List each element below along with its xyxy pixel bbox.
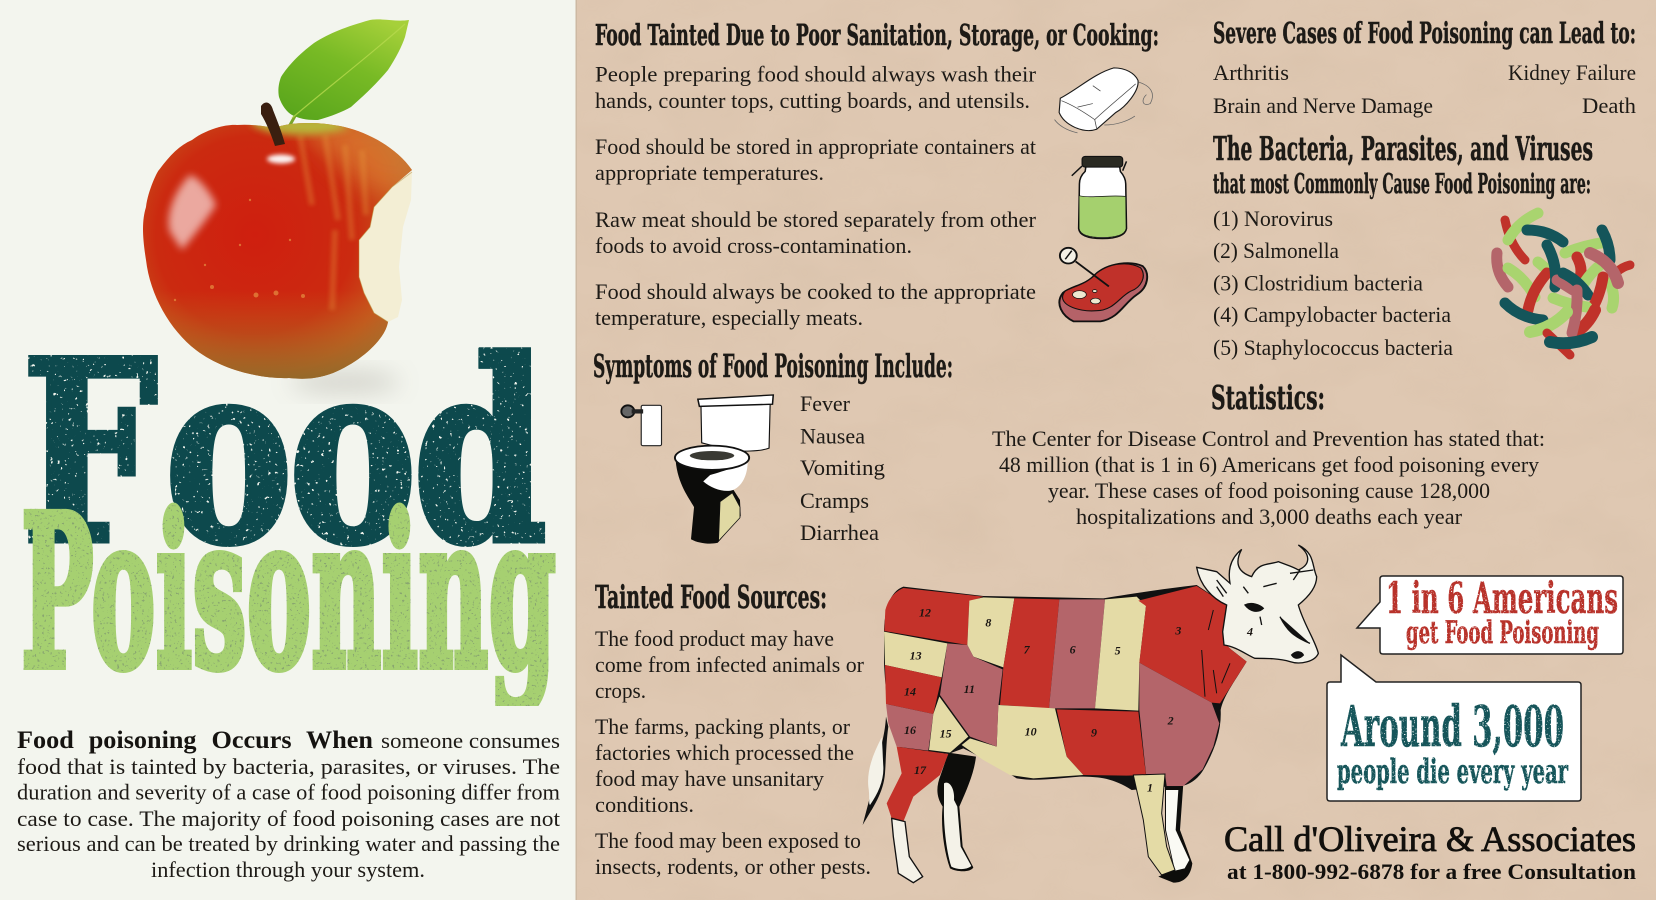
region 16 bbox=[886, 704, 933, 751]
text: sources: come from infected animals or bbox=[595, 652, 864, 677]
region numbers: 4 bbox=[1246, 625, 1253, 639]
far legs bbox=[937, 753, 976, 871]
intro paragraph: case to case. The majority of food poisoning cases are not bbox=[17, 806, 561, 831]
head region 4 bbox=[1197, 545, 1318, 663]
call to action bbox=[1224, 819, 1636, 884]
list: pathogens: (1) Norovirus bbox=[1213, 206, 1333, 231]
text: hygiene tips: hands, counter tops, cutting boards, and utensils. bbox=[595, 88, 1030, 113]
text: sources: insects, rodents, or other pests. bbox=[595, 854, 871, 879]
panel: food tainted section bbox=[595, 18, 1159, 330]
text: cdc statement: The Center for Disease Control and Prevention has stated that: bbox=[992, 426, 1545, 451]
list: symptoms: Nausea bbox=[800, 424, 865, 448]
region 11 bbox=[940, 643, 1003, 747]
text: hygiene tips: foods to avoid cross-contamination. bbox=[595, 233, 912, 258]
region 10 bbox=[962, 705, 1083, 778]
intro paragraph: serious and can be treated by drinking water and passing the bbox=[17, 831, 560, 856]
intro paragraph bbox=[17, 727, 561, 882]
intro paragraph: someone consumes bbox=[381, 728, 560, 753]
region numbers: 7 bbox=[1024, 642, 1031, 656]
text: sources: factories which processed the bbox=[595, 740, 854, 765]
panel: tainted food sources bbox=[595, 578, 871, 879]
region 8 bbox=[967, 597, 1014, 667]
intro paragraph: duration and severity of a case of food poisoning differ from bbox=[17, 780, 560, 804]
text: sources bbox=[595, 626, 871, 879]
list: pathogens: (5) Staphylococcus bacteria bbox=[1213, 335, 1453, 360]
text: cdc statement bbox=[992, 426, 1545, 529]
list: symptoms: Vomiting bbox=[800, 455, 885, 480]
region numbers bbox=[904, 606, 1253, 794]
panel: statistics bbox=[992, 378, 1545, 529]
text: sources: The food product may have bbox=[595, 626, 834, 651]
list: complications: Death bbox=[1582, 93, 1636, 118]
text: hygiene tips: Food should be stored in appropriate containers at bbox=[595, 134, 1037, 159]
list: complications: Arthritis bbox=[1213, 60, 1289, 85]
text: Poisoning bbox=[21, 469, 556, 716]
list: pathogens: (4) Campylobacter bacteria bbox=[1213, 302, 1451, 327]
region 5 bbox=[1095, 597, 1146, 711]
list: pathogens: (2) Salmonella bbox=[1213, 238, 1339, 263]
region 12 bbox=[884, 588, 983, 645]
heading: tainted food sources: Tainted Food Sources: bbox=[595, 578, 827, 616]
text: sources: The farms, packing plants, or bbox=[595, 714, 850, 739]
list: symptoms: Diarrhea bbox=[800, 520, 879, 545]
list: complications: Brain and Nerve Damage bbox=[1213, 93, 1433, 118]
tail bbox=[863, 717, 888, 825]
region 2 bbox=[1139, 663, 1219, 786]
panel: severe cases bbox=[1213, 16, 1636, 118]
text: sources: crops. bbox=[595, 678, 646, 703]
intro paragraph: food that is tainted by bacteria, parasites, or viruses. The bbox=[17, 754, 560, 779]
region 1 foreleg bbox=[1133, 774, 1175, 875]
text: cdc statement: year. These cases of food poisoning cause 128,000 bbox=[1048, 478, 1490, 503]
region numbers: 1 bbox=[1147, 780, 1153, 794]
text: hygiene tips: temperature, especially meats. bbox=[595, 305, 863, 330]
icon: toilet paper bbox=[621, 405, 662, 446]
heading: statistics: Statistics: bbox=[1211, 378, 1325, 417]
body outline bbox=[884, 585, 1247, 790]
region numbers: 9 bbox=[1091, 726, 1097, 740]
region numbers: 11 bbox=[964, 682, 975, 696]
region 7 bbox=[1000, 598, 1059, 708]
text: hygiene tips: Food should always be cooked to the appropriate bbox=[595, 279, 1036, 304]
icon: toilet bbox=[675, 395, 773, 544]
call to action: at 1-800-992-6878 for a free Consultation bbox=[1227, 859, 1636, 884]
callout: around 3,000 bbox=[1327, 655, 1581, 801]
intro paragraph: infection through your system. bbox=[151, 857, 425, 882]
region 6 bbox=[1049, 599, 1105, 708]
region numbers: 8 bbox=[985, 615, 991, 629]
text: hygiene tips: appropriate temperatures. bbox=[595, 160, 824, 185]
panel: left title column bbox=[0, 0, 577, 900]
region numbers: 17 bbox=[914, 763, 927, 777]
region numbers: 15 bbox=[940, 726, 952, 740]
region numbers: 3 bbox=[1174, 624, 1181, 638]
list: symptoms: Fever bbox=[800, 391, 850, 416]
text: cdc statement: 48 million (that is 1 in 6) Americans get food poisoning every bbox=[999, 452, 1540, 477]
text: sources: conditions. bbox=[595, 792, 694, 817]
list: pathogens: (3) Clostridium bacteria bbox=[1213, 270, 1423, 296]
region 13 bbox=[884, 632, 947, 677]
intro paragraph: Food poisoning Occurs When bbox=[17, 727, 373, 754]
text: hygiene tips bbox=[595, 62, 1037, 330]
region numbers: 16 bbox=[904, 723, 916, 737]
text: sources: The food may been exposed to bbox=[595, 828, 861, 853]
list: complications: Kidney Failure bbox=[1508, 60, 1636, 85]
call to action: Call d'Oliveira & Associates bbox=[1224, 819, 1636, 859]
text: hygiene tips: Raw meat should be stored separately from other bbox=[595, 207, 1036, 232]
icon: jar bbox=[1072, 156, 1126, 239]
region numbers: 10 bbox=[1025, 725, 1037, 739]
region numbers: 2 bbox=[1167, 714, 1174, 728]
region numbers: 14 bbox=[904, 685, 916, 699]
callout: 1 in 6 Americans bbox=[1357, 574, 1623, 654]
region 9 bbox=[1057, 709, 1146, 776]
region numbers: 5 bbox=[1115, 644, 1121, 658]
region numbers: 13 bbox=[910, 648, 922, 662]
icon: soap bar bbox=[1055, 68, 1152, 133]
icon: steak with thermometer bbox=[1059, 248, 1147, 321]
illustration: cow beef-cut map bbox=[863, 545, 1318, 883]
region numbers: 6 bbox=[1070, 642, 1076, 656]
region 3 bbox=[1138, 586, 1247, 703]
panel: symptoms section bbox=[593, 347, 953, 545]
heading: food tainted: Food Tainted Due to Poor Sanitation, Storage, or Cooking: bbox=[595, 18, 1159, 52]
text: hygiene tips: People preparing food should always wash their bbox=[595, 62, 1037, 86]
heading: symptoms: Symptoms of Food Poisoning Include: bbox=[593, 347, 953, 385]
title: Food: Food bbox=[22, 308, 547, 599]
list: symptoms bbox=[800, 391, 885, 545]
region 15 bbox=[929, 697, 968, 753]
region numbers: 12 bbox=[919, 606, 931, 620]
text: sources: food may have unsanitary bbox=[595, 766, 825, 791]
list: pathogens bbox=[1213, 206, 1453, 360]
region 14 bbox=[885, 665, 942, 714]
icon: bitten apple bbox=[130, 19, 430, 392]
list: complications bbox=[1213, 60, 1636, 118]
panel: bacteria and viruses bbox=[1213, 129, 1630, 360]
rear foot bbox=[892, 818, 923, 883]
text: cdc statement: hospitalizations and 3,000 deaths each year bbox=[1076, 504, 1462, 529]
icon: bacteria cluster bbox=[1497, 213, 1630, 355]
list: symptoms: Cramps bbox=[800, 488, 869, 513]
region 17 bbox=[887, 747, 948, 822]
